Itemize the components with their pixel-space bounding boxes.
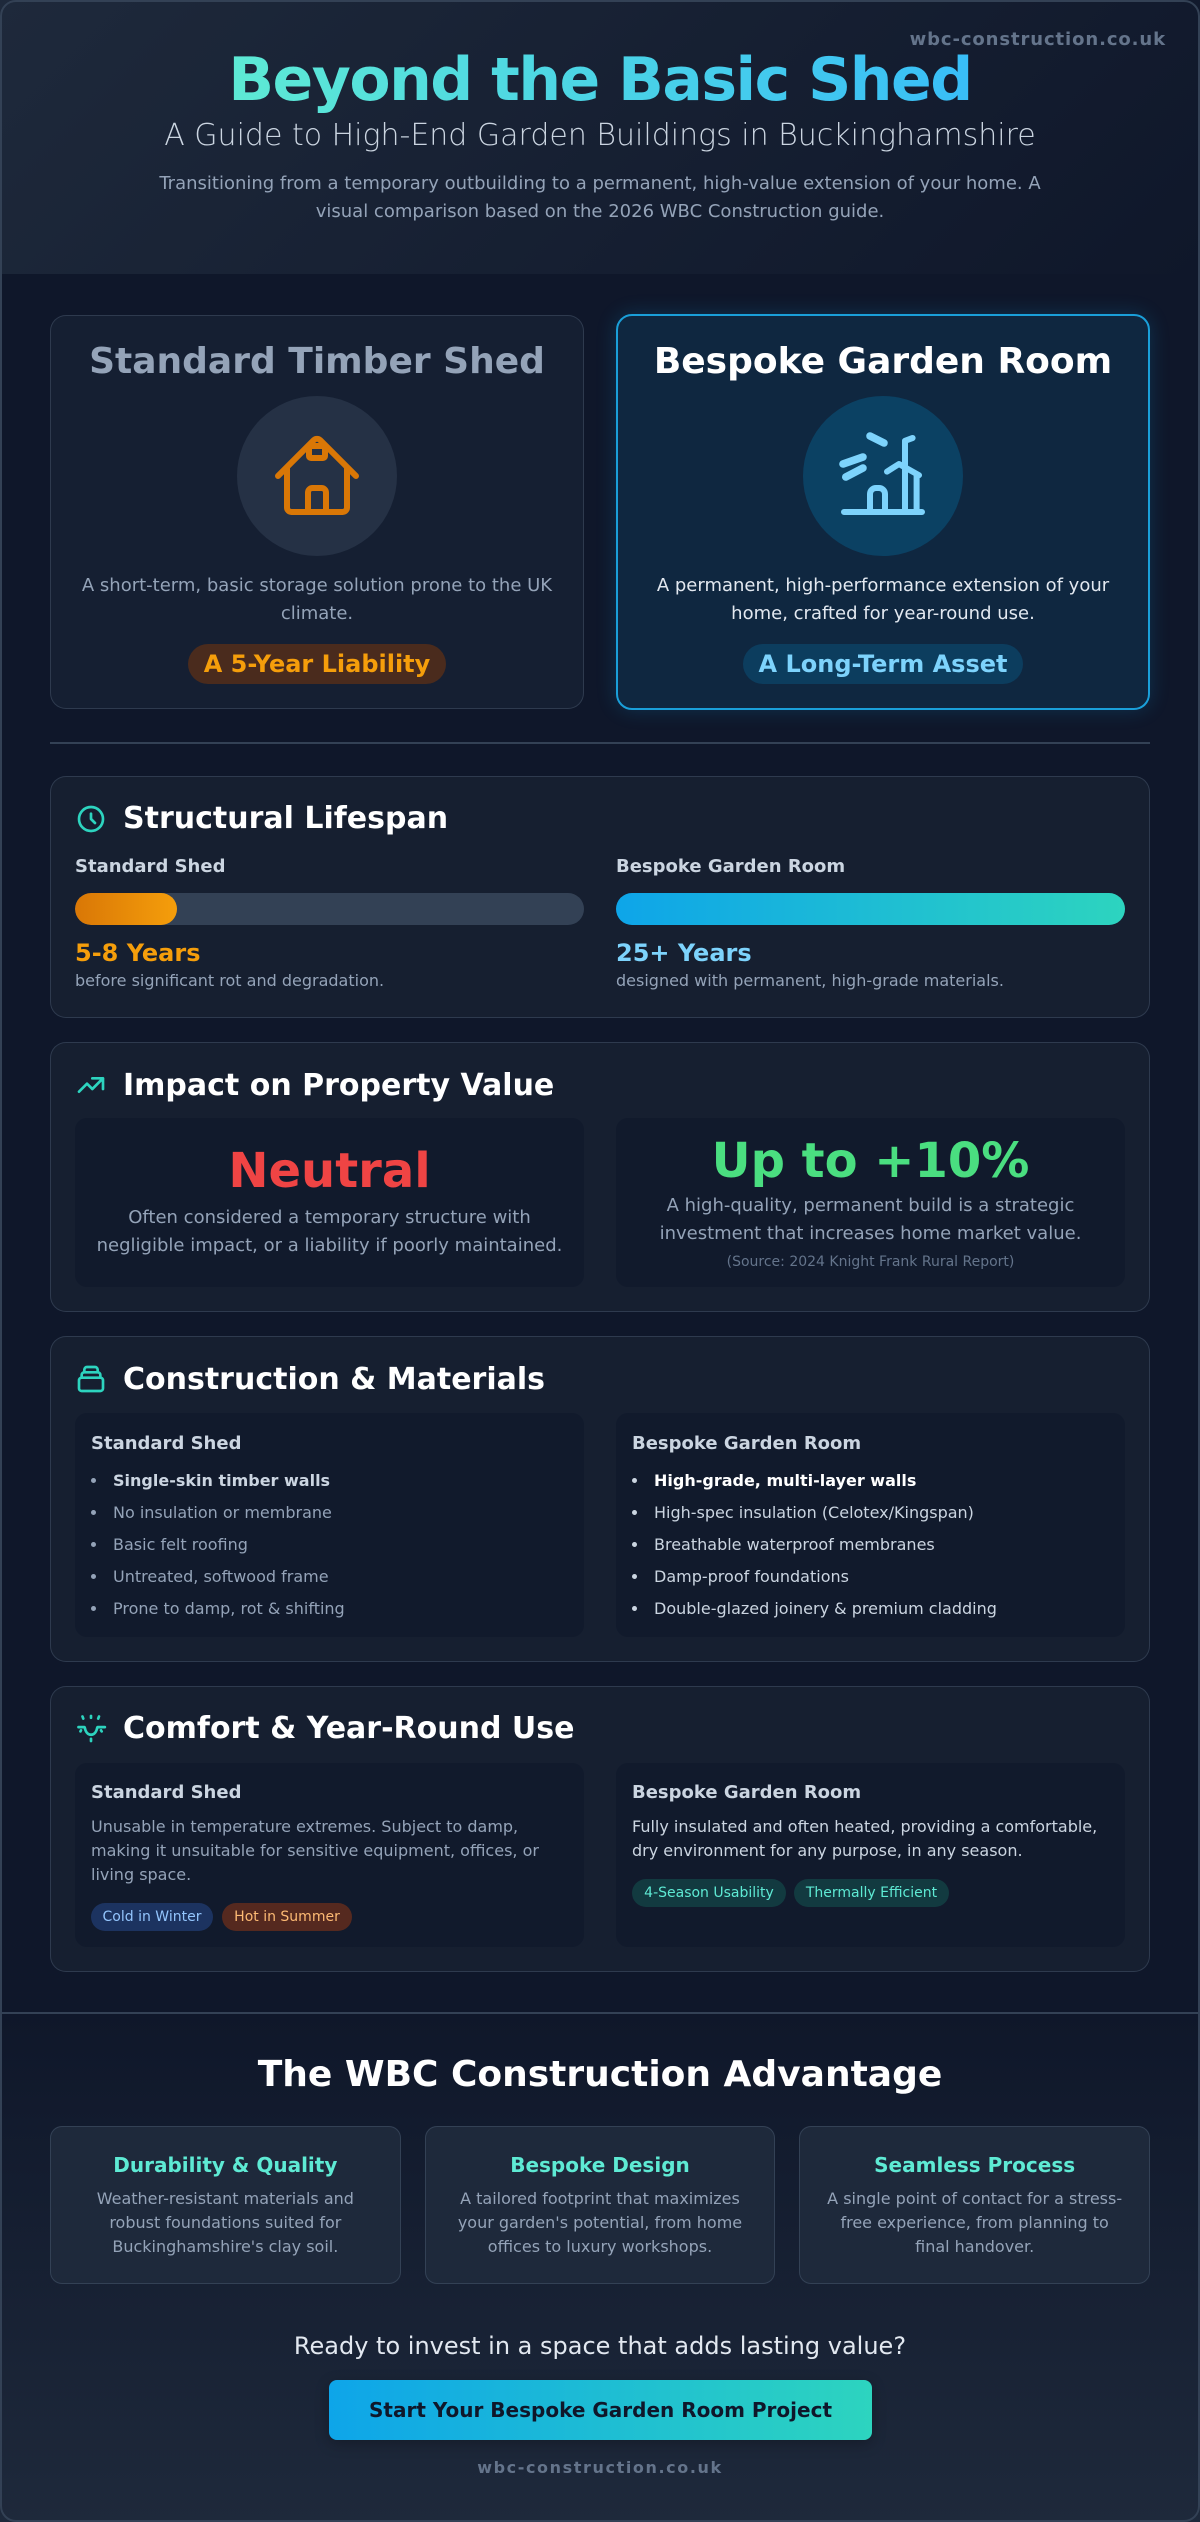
badge: A 5-Year Liability [204, 650, 430, 678]
icon: layers [78, 1366, 104, 1392]
list: High-spec insulation (Celotex/Kingspan) [654, 1503, 974, 1522]
description: climate. [281, 603, 353, 624]
text: making it unsuitable for sensitive equipment, offices, or [91, 1841, 539, 1860]
description: A short-term, basic storage solution prone to the UK [82, 575, 552, 596]
intro text: Transitioning from a temporary outbuilding to a permanent, high-value extension of your home. A [159, 173, 1041, 194]
panel: property value [50, 1042, 1150, 1312]
neutral box [75, 1118, 584, 1287]
card text: A tailored footprint that maximizes [460, 2189, 740, 2208]
list: Double-glazed joinery & premium cladding [654, 1599, 997, 1618]
header [0, 0, 1200, 274]
title: Beyond the Basic Shed [228, 45, 972, 115]
subheading: Standard Shed [91, 1433, 241, 1454]
tag: thermal [794, 1879, 949, 1907]
heading: Impact on Property Value [123, 1068, 554, 1103]
card text: final handover. [915, 2237, 1034, 2256]
card: design [425, 2126, 775, 2284]
card text: free experience, from planning to [840, 2213, 1109, 2232]
label: Bespoke Garden Room [616, 856, 845, 877]
list: No insulation or membrane [113, 1503, 332, 1522]
card text: Buckinghamshire's clay soil. [112, 2237, 338, 2256]
text [97, 1207, 562, 1256]
list: Damp-proof foundations [654, 1567, 849, 1586]
card title: Bespoke Design [510, 2153, 690, 2177]
footer section [0, 2012, 1200, 2522]
tag: four season: 4-Season Usability [644, 1885, 774, 1901]
call to action text: Ready to invest in a space that adds lasting value? [294, 2332, 906, 2360]
value: 25+ Years [616, 939, 752, 967]
list [91, 1471, 345, 1618]
list: Basic felt roofing [113, 1535, 248, 1554]
card text: offices to luxury workshops. [488, 2237, 712, 2256]
list [632, 1471, 997, 1618]
standard shed comfort [75, 1763, 584, 1947]
tag: cold: Cold in Winter [103, 1909, 201, 1925]
button: Start Your Bespoke Garden Room Project [369, 2398, 832, 2422]
card text [458, 2189, 742, 2256]
text: A high-quality, permanent build is a strategic [667, 1195, 1074, 1216]
intro text [159, 173, 1041, 222]
badge [188, 644, 446, 684]
subheading: Bespoke Garden Room [632, 1782, 861, 1803]
icon: garden room [803, 396, 963, 556]
uplift box [616, 1118, 1125, 1287]
list: Untreated, softwood frame [113, 1567, 329, 1586]
icon: clock [78, 806, 104, 832]
card: durability [50, 2126, 401, 2284]
value: Up to +10% [712, 1133, 1029, 1189]
bar [616, 893, 1125, 925]
subheading: Bespoke Garden Room [632, 1433, 861, 1454]
list: Single-skin timber walls [113, 1471, 330, 1490]
intro text: visual comparison based on the 2026 WBC Construction guide. [316, 201, 884, 222]
list: Prone to damp, rot & shifting [113, 1599, 345, 1618]
heading: Standard Timber Shed [89, 341, 545, 382]
value: Neutral [228, 1143, 431, 1199]
card text: robust foundations suited for [109, 2213, 341, 2232]
text [632, 1817, 1097, 1860]
tag: hot: Hot in Summer [234, 1909, 340, 1925]
panel: standard timber shed [50, 315, 584, 709]
website label: wbc-construction.co.uk [910, 29, 1166, 50]
card text [827, 2189, 1122, 2256]
description: A permanent, high-performance extension of your [657, 575, 1109, 596]
website label: wbc-construction.co.uk [477, 2458, 723, 2477]
text: dry environment for any purpose, in any season. [632, 1841, 1023, 1860]
garden room lifespan [616, 856, 1125, 990]
heading: Construction & Materials [123, 1362, 545, 1397]
heading: Structural Lifespan [123, 801, 448, 836]
card text: your garden's potential, from home [458, 2213, 742, 2232]
icon: trending up [78, 1076, 104, 1094]
text [660, 1195, 1081, 1244]
panel: structural lifespan [50, 776, 1150, 1018]
text: investment that increases home market value. [660, 1223, 1081, 1244]
bar [75, 893, 584, 925]
list: Breathable waterproof membranes [654, 1535, 935, 1554]
card text: Weather-resistant materials and [97, 2189, 354, 2208]
caption: designed with permanent, high-grade materials. [616, 971, 1004, 990]
panel: construction and materials [50, 1336, 1150, 1662]
tag: four season [632, 1879, 786, 1907]
description: home, crafted for year-round use. [731, 603, 1035, 624]
text: living space. [91, 1865, 191, 1884]
heading: Comfort & Year-Round Use [123, 1711, 574, 1746]
subheading: Standard Shed [91, 1782, 241, 1803]
heading: Bespoke Garden Room [654, 341, 1112, 382]
value: 5-8 Years [75, 939, 200, 967]
subtitle: A Guide to High-End Garden Buildings in Buckinghamshire [164, 118, 1036, 153]
icon: shed [237, 396, 397, 556]
card: process [799, 2126, 1150, 2284]
button [329, 2380, 872, 2440]
card title: Seamless Process [874, 2153, 1075, 2177]
garden room materials [616, 1413, 1125, 1637]
card title: Durability & Quality [113, 2153, 337, 2177]
garden room comfort [616, 1763, 1125, 1947]
standard shed lifespan [75, 856, 584, 990]
badge [743, 644, 1023, 684]
icon: comfort [77, 1714, 106, 1742]
tag: thermal: Thermally Efficient [806, 1885, 937, 1901]
text: negligible impact, or a liability if poorly maintained. [97, 1235, 562, 1256]
text [91, 1817, 539, 1884]
heading: The WBC Construction Advantage [258, 2054, 942, 2095]
card text: A single point of contact for a stress- [827, 2189, 1122, 2208]
list: High-grade, multi-layer walls [654, 1471, 916, 1490]
source: (Source: 2024 Knight Frank Rural Report) [727, 1254, 1014, 1270]
tag: cold [91, 1903, 213, 1931]
tag: hot [222, 1903, 352, 1931]
label: Standard Shed [75, 856, 225, 877]
panel: bespoke garden room [616, 314, 1150, 710]
panel: comfort and year-round use [50, 1686, 1150, 1972]
badge: A Long-Term Asset [759, 650, 1007, 678]
text: Fully insulated and often heated, providing a comfortable, [632, 1817, 1097, 1836]
text: Often considered a temporary structure with [128, 1207, 531, 1228]
standard shed materials [75, 1413, 584, 1637]
description [82, 575, 552, 624]
text: Unusable in temperature extremes. Subject to damp, [91, 1817, 518, 1836]
card text [97, 2189, 354, 2256]
caption: before significant rot and degradation. [75, 971, 384, 990]
description [657, 575, 1110, 624]
